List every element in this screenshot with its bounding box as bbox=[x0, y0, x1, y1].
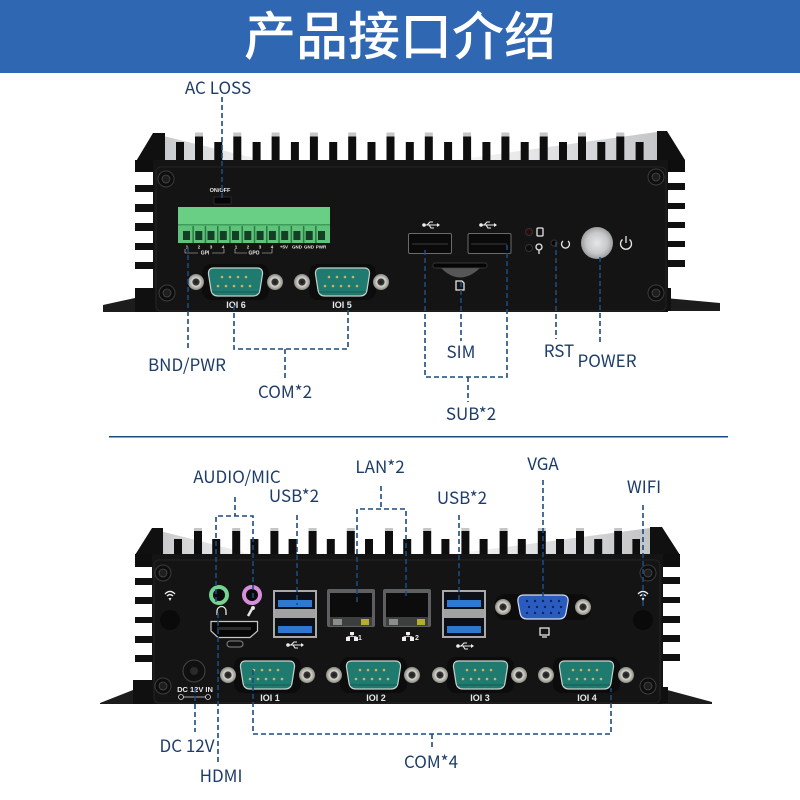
callout: SIM: SIM bbox=[447, 338, 475, 363]
callout: AC LOSS bbox=[185, 74, 251, 199]
serial ports 1 to 4 bbox=[220, 657, 634, 703]
callout: SUB*2: SUB*2 bbox=[446, 400, 496, 425]
callout: DC 12V bbox=[160, 688, 215, 757]
serial ports 5 and 6 bbox=[188, 264, 389, 310]
callout: LAN*2: LAN*2 bbox=[355, 453, 405, 478]
terminal labels: 1 bbox=[235, 244, 238, 250]
green terminal block bbox=[178, 207, 330, 243]
callout: HDMI: HDMI bbox=[200, 762, 242, 787]
wifi antenna holes bbox=[160, 592, 653, 630]
serial ports 5 and 6: IOI 6 bbox=[226, 300, 246, 310]
serial ports 1 to 4: IOI 4 bbox=[577, 693, 597, 703]
callout: AC LOSS: AC LOSS bbox=[185, 74, 251, 99]
terminal labels: GND bbox=[292, 244, 303, 250]
callout: POWER: POWER bbox=[578, 347, 637, 372]
power button bbox=[581, 227, 632, 259]
terminal labels: GND bbox=[304, 244, 315, 250]
terminal labels: 3 bbox=[259, 244, 262, 250]
callout: COM*4: COM*4 bbox=[404, 748, 458, 773]
serial ports 1 to 4: IOI 1 bbox=[260, 693, 280, 703]
terminal labels: 2 bbox=[198, 244, 201, 250]
callout: AUDIO/MIC bbox=[193, 463, 281, 602]
serial ports 1 to 4: IOI 2 bbox=[366, 693, 386, 703]
callout: VGA: VGA bbox=[527, 450, 559, 475]
callout: WIFI bbox=[627, 473, 661, 607]
AC loss switch bbox=[210, 188, 231, 204]
callout: RST bbox=[544, 242, 574, 362]
terminal labels: GPI bbox=[201, 250, 210, 256]
callout: BND/PWR: BND/PWR bbox=[148, 351, 226, 376]
HDMI port bbox=[211, 622, 258, 647]
DC power jack bbox=[177, 660, 213, 700]
USB 3.0 ports bbox=[273, 590, 486, 649]
callout: POWER bbox=[578, 257, 637, 372]
callout: COM*2 bbox=[234, 305, 348, 403]
AC loss switch: ON/OFF bbox=[210, 188, 231, 194]
callout: DC 12V: DC 12V bbox=[160, 732, 215, 757]
status LEDs and reset bbox=[526, 228, 570, 254]
serial ports 5 and 6: IOI 5 bbox=[332, 300, 352, 310]
terminal labels bbox=[185, 244, 327, 256]
SIM slot bbox=[433, 263, 487, 290]
callout: COM*4 bbox=[253, 670, 611, 773]
callout: SUB*2 bbox=[425, 245, 507, 425]
LAN ports: 1 bbox=[358, 635, 362, 642]
LAN ports: 2 bbox=[415, 635, 419, 642]
callout: LAN*2 bbox=[355, 453, 406, 602]
callout: USB*2 left: USB*2 bbox=[269, 482, 319, 507]
terminal labels: 2 bbox=[247, 244, 250, 250]
callout: SIM bbox=[447, 282, 475, 363]
VGA port bbox=[495, 594, 591, 637]
front USB ports bbox=[408, 222, 511, 254]
serial ports 1 to 4: IOI 3 bbox=[470, 693, 490, 703]
callout: COM*2: COM*2 bbox=[258, 378, 312, 403]
callout: USB*2 left bbox=[269, 482, 319, 605]
terminal labels: 1 bbox=[186, 244, 189, 250]
silver rear surface bbox=[155, 134, 262, 160]
DC power jack: DC 12V IN bbox=[177, 685, 213, 694]
callout: AUDIO/MIC: AUDIO/MIC bbox=[193, 463, 281, 488]
device: top panel view bbox=[103, 131, 720, 312]
callout: BND/PWR bbox=[148, 247, 226, 376]
audio jacks bbox=[211, 587, 260, 616]
callout: WIFI: WIFI bbox=[627, 473, 661, 498]
terminal labels: +5V bbox=[280, 244, 288, 250]
title banner bbox=[0, 0, 800, 73]
callout: RST: RST bbox=[544, 337, 574, 362]
divider bbox=[109, 436, 728, 438]
callout: USB*2 right: USB*2 bbox=[437, 484, 487, 509]
terminal labels: 4 bbox=[222, 244, 225, 250]
device: bottom panel view bbox=[100, 527, 712, 704]
LAN ports bbox=[327, 589, 431, 642]
terminal labels: PWR bbox=[316, 244, 327, 250]
terminal labels: GPO bbox=[248, 250, 260, 256]
terminal labels: 3 bbox=[210, 244, 213, 250]
terminal labels: 4 bbox=[271, 244, 274, 250]
callout: USB*2 right bbox=[437, 484, 487, 600]
silver rear surface bbox=[152, 529, 255, 555]
